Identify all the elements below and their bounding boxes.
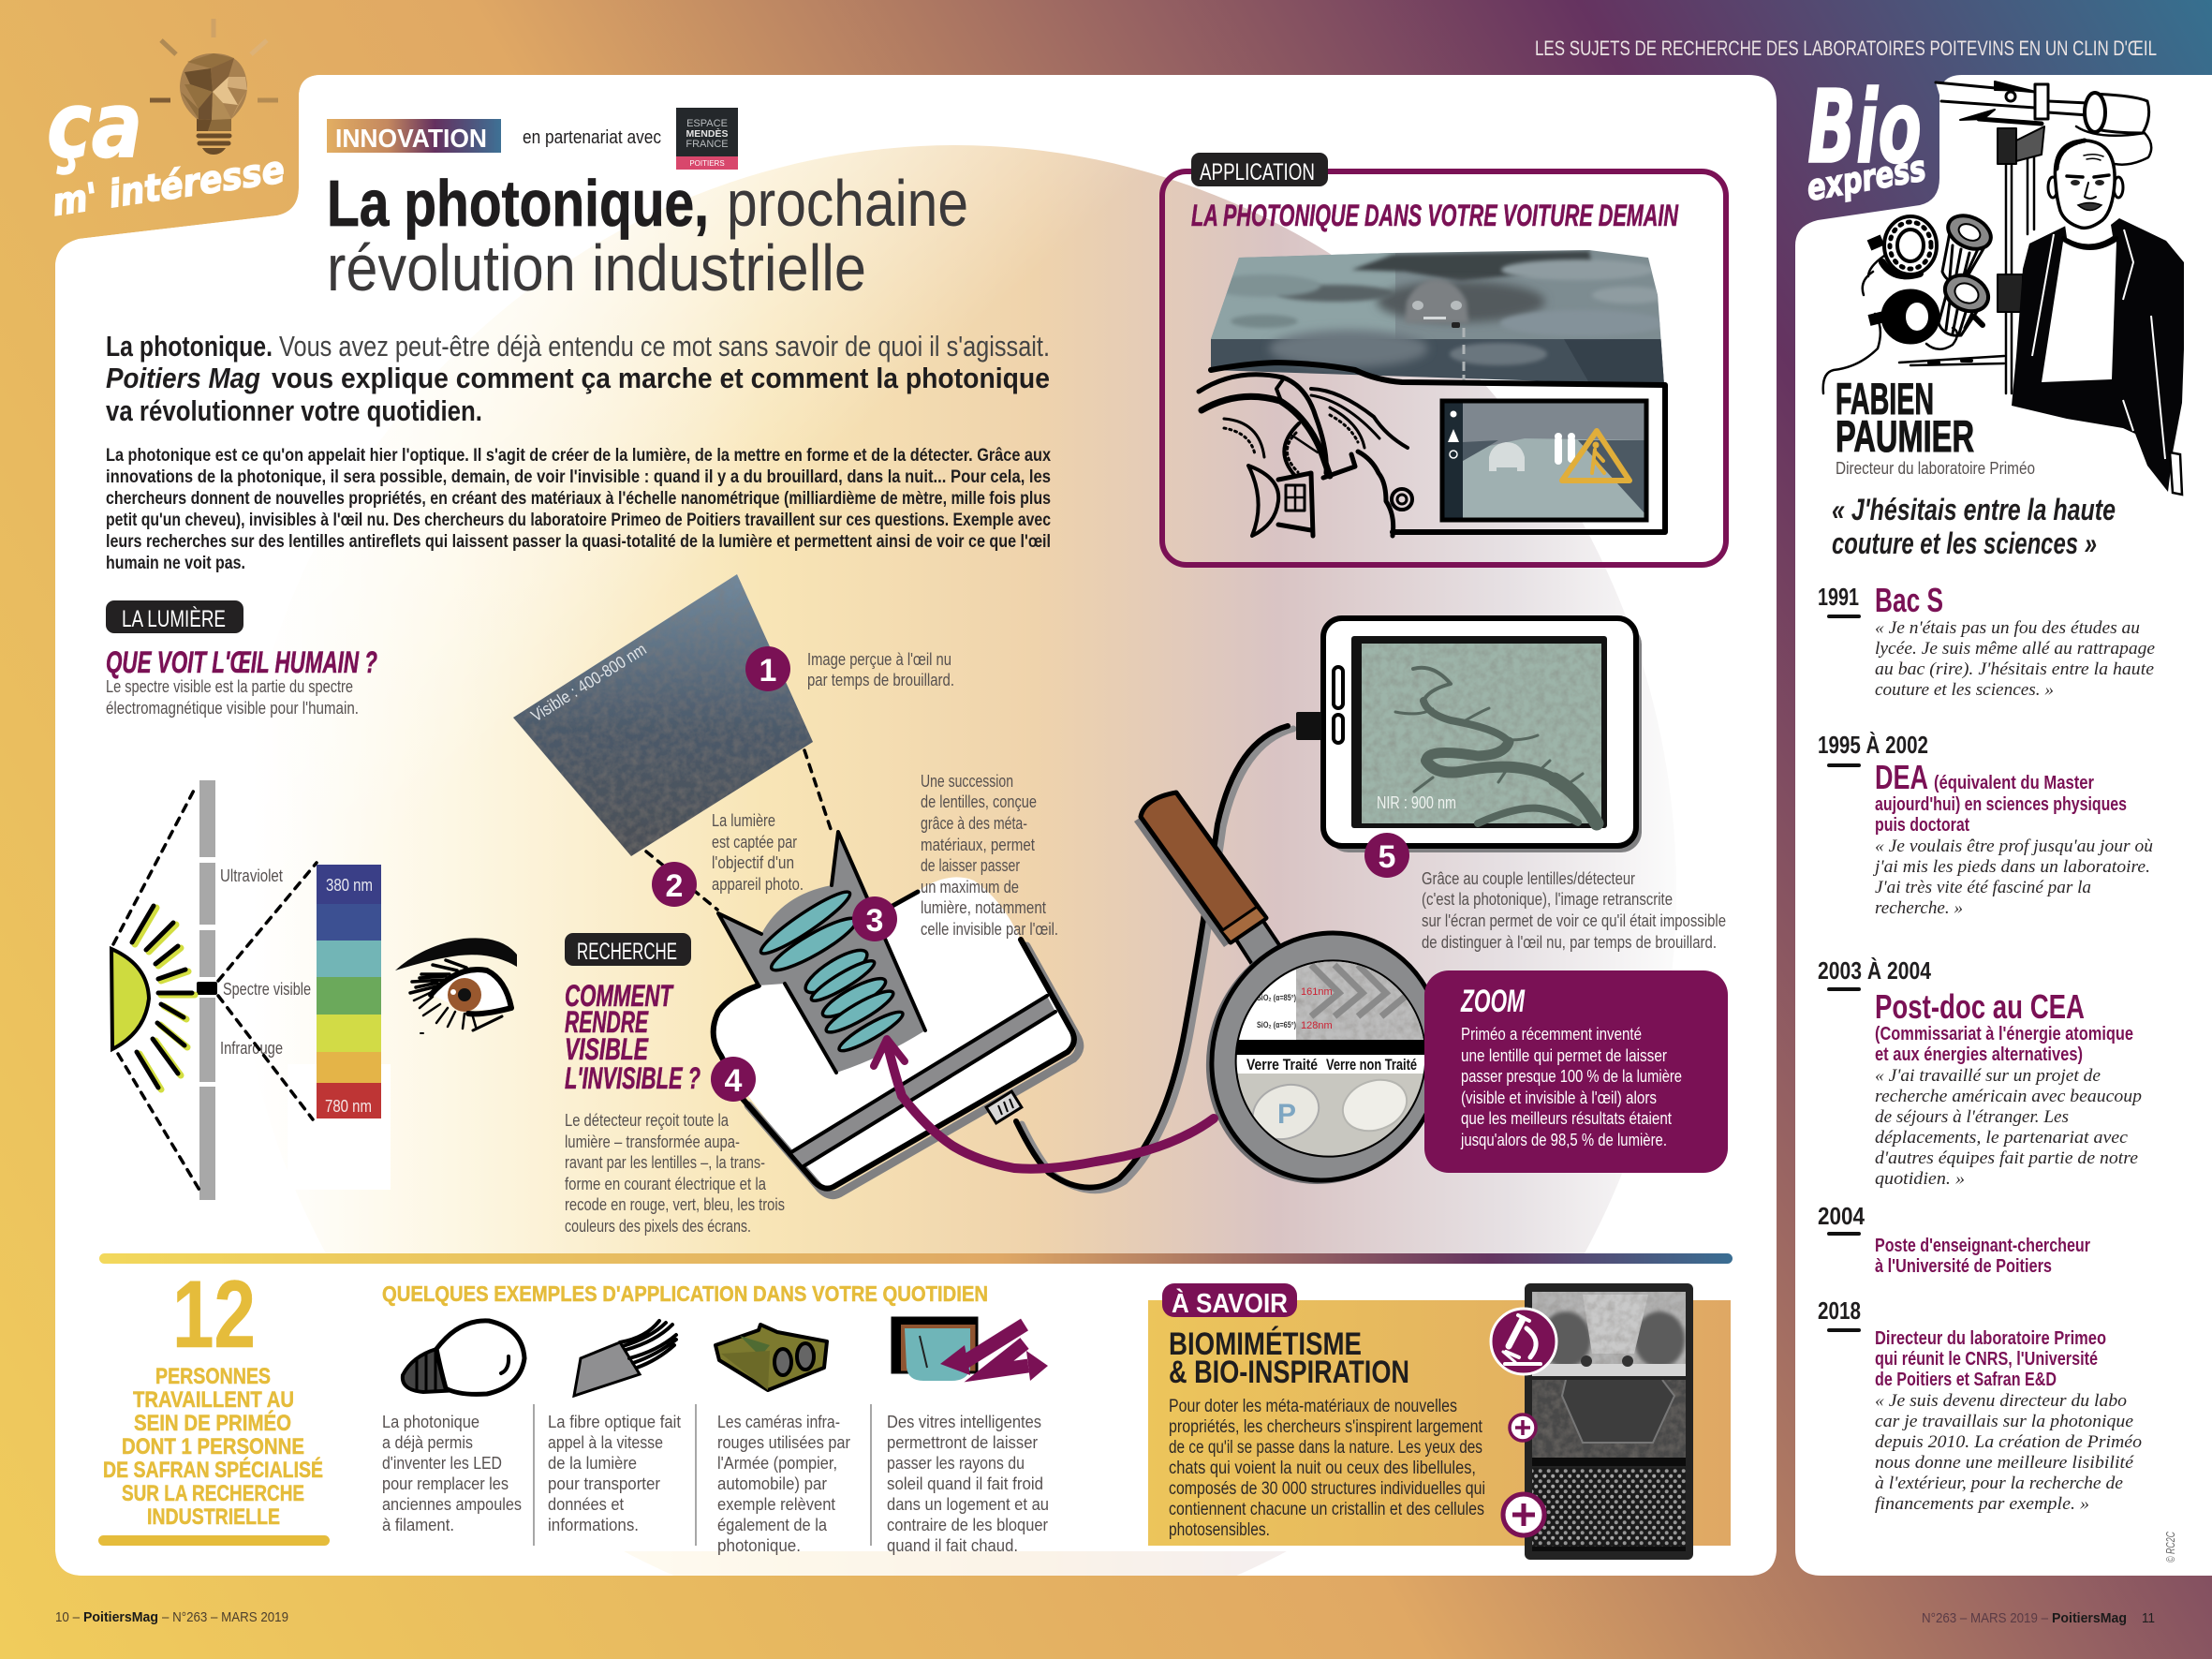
text: la lumière est captée: l'objectif d'un bbox=[712, 853, 794, 872]
cable between camera and tablet bbox=[1016, 726, 1293, 1191]
timeline: 2018: à l'extérieur, pour la recherche de bbox=[1875, 1474, 2123, 1493]
application text columns: à filament. bbox=[382, 1516, 454, 1534]
timeline: 2003 à 2004: d'autres équipes fait partie de notre bbox=[1875, 1148, 2138, 1168]
spectrum labels: Infrarouge bbox=[220, 1039, 283, 1058]
logo: ça m'intéresse: m' intéresse bbox=[50, 148, 288, 225]
credit: © RC2C bbox=[2163, 1532, 2177, 1563]
timeline: 2003 à 2004 bbox=[1818, 956, 2142, 1189]
tag: la lumière bbox=[106, 600, 243, 633]
application text columns: contraire de les bloquer bbox=[887, 1516, 1048, 1534]
panel: à savoir: contiennent chacune un cristallin et des cellules bbox=[1169, 1500, 1484, 1519]
timeline: 1991: au bac (rire). J'hésitais entre la haute bbox=[1875, 659, 2154, 679]
application text columns: photonique. bbox=[717, 1536, 801, 1555]
illustration: tablet bbox=[1296, 618, 1642, 852]
text: spectre visible bbox=[106, 677, 359, 718]
logo: ça m'intéresse: ça bbox=[47, 73, 142, 178]
logo: Espace Mendès France: POITIERS bbox=[689, 159, 725, 168]
text: la lumière est captée: appareil photo. bbox=[712, 875, 804, 894]
text: succession de lentilles: de laisser passer bbox=[921, 856, 1020, 875]
panel: main article bbox=[55, 75, 1777, 1635]
text: succession de lentilles bbox=[921, 772, 1058, 939]
timeline: 2004: à l'Université de Poitiers bbox=[1875, 1256, 2052, 1277]
panel: zoom: une lentille qui permet de laisser bbox=[1461, 1046, 1667, 1065]
timeline: 1995 à 2002: 1995 À 2002 bbox=[1818, 731, 1928, 759]
illustration: magnifying glass: Verre Traité bbox=[1246, 1056, 1318, 1074]
timeline: 2004: Poste d'enseignant-chercheur bbox=[1875, 1236, 2090, 1256]
logo: ça m'intéresse bbox=[47, 73, 288, 225]
footer right: N°263 – MARS 2019 – bbox=[1922, 1610, 2049, 1626]
application text columns: permettront de laisser bbox=[887, 1433, 1038, 1452]
timeline: 1995 à 2002 bbox=[1818, 731, 2153, 918]
timeline: 2003 à 2004: quotidien. » bbox=[1875, 1169, 1965, 1189]
text: succession de lentilles: celle invisible par l'œil. bbox=[921, 920, 1058, 939]
text: la lumière est captée: La lumière bbox=[712, 811, 775, 830]
panel: zoom: (visible et invisible à l'œil) alors bbox=[1461, 1089, 1657, 1107]
title: révolution industrielle bbox=[327, 231, 866, 304]
application text columns: Les caméras infra- bbox=[717, 1413, 840, 1431]
text: spectre visible: électromagnétique visible pour l'humain. bbox=[106, 699, 359, 718]
chart: visible spectrum colours bbox=[317, 865, 381, 1118]
title: La photonique, bbox=[327, 167, 709, 240]
logo: Espace Mendès France: FRANCE bbox=[686, 139, 729, 150]
icon: human eye bbox=[395, 938, 517, 1033]
stat: 12 personnes: SUR LA RECHERCHE bbox=[122, 1481, 304, 1506]
illustration: magnifying glass: 128nm bbox=[1301, 1020, 1333, 1031]
white patch behind spectrum bbox=[288, 1064, 391, 1190]
illustration: tablet: NIR : 900 nm bbox=[1377, 793, 1456, 812]
spectrum labels: Spectre visible bbox=[223, 980, 311, 999]
chart: electromagnetic spectrum bar bbox=[197, 780, 217, 1200]
timeline: 2003 à 2004: Post-doc au CEA bbox=[1875, 987, 2085, 1026]
timeline: 1991: « Je n'étais pas un fou des études au bbox=[1875, 618, 2140, 638]
heading: comment rendre visible l'invisible: L'INVISIBLE ? bbox=[565, 1061, 700, 1095]
application text columns: pour transporter bbox=[548, 1474, 660, 1493]
timeline: 1991 bbox=[1818, 581, 2155, 700]
text: succession de lentilles: grâce à des méta- bbox=[921, 814, 1027, 833]
timeline: 2018: depuis 2010. La création de Priméo bbox=[1875, 1432, 2142, 1452]
logo: bio express bbox=[1804, 69, 1929, 209]
panel: à savoir: & BIO-INSPIRATION bbox=[1169, 1355, 1409, 1390]
chart: visible spectrum colours: 380 nm bbox=[326, 876, 373, 895]
body paragraph bbox=[106, 446, 1051, 573]
application text columns: d'inventer les LED bbox=[382, 1454, 502, 1473]
text: couple lentilles/détecteur: de distinguer à l'œil nu, par temps de brouillard. bbox=[1422, 933, 1717, 952]
stat: 12 personnes: SEIN DE PRIMÉO bbox=[134, 1410, 291, 1436]
timeline: 2003 à 2004: 2003 À 2004 bbox=[1818, 956, 1931, 985]
panel: zoom: passer presque 100 % de la lumière bbox=[1461, 1067, 1682, 1086]
text: couple lentilles/détecteur: Grâce au couple lentilles/détecteur bbox=[1422, 869, 1635, 888]
title bbox=[327, 167, 968, 304]
panel: à savoir: chats qui voient la nuit ou ceux des libellules, bbox=[1169, 1459, 1476, 1478]
timeline: 1995 à 2002: recherche. » bbox=[1875, 898, 1963, 918]
photo: visible image in fog: Visible : 400-800 nm bbox=[528, 640, 650, 725]
application text columns: dans un logement et au bbox=[887, 1495, 1049, 1514]
footer left: PoitiersMag bbox=[83, 1609, 158, 1625]
partner line: en partenariat avec bbox=[523, 127, 661, 148]
person bbox=[2012, 141, 2184, 495]
quote bbox=[1832, 493, 2116, 560]
timeline: 2003 à 2004: déplacements, le partenariat avec bbox=[1875, 1128, 2129, 1148]
application text columns: exemple relèvent bbox=[717, 1495, 835, 1514]
application text columns: quand il fait chaud. bbox=[887, 1536, 1018, 1555]
tag: recherche bbox=[565, 933, 691, 966]
logo: bio express: Bio bbox=[1807, 69, 1922, 186]
name: Fabien Paumier: PAUMIER bbox=[1836, 411, 1974, 461]
optical rings bbox=[1823, 209, 1997, 393]
logo: Espace Mendès France: ESPACE bbox=[686, 118, 728, 129]
text: le détecteur bbox=[565, 1111, 785, 1236]
panel: application: LA PHOTONIQUE DANS VOTRE VOITURE DEMAIN bbox=[1191, 199, 1679, 232]
panel: application: APPLICATION bbox=[1200, 159, 1315, 185]
panel: à savoir: propriétés, les chercheurs s'inspirent largement bbox=[1169, 1417, 1483, 1437]
machine arm bbox=[1899, 81, 2151, 393]
timeline: 2004: 2004 bbox=[1818, 1202, 1865, 1230]
text: image perçue: par temps de brouillard. bbox=[807, 671, 954, 689]
quote: « J'hésitais entre la haute bbox=[1832, 493, 2116, 526]
timeline: 2018: financements par exemple. » bbox=[1875, 1494, 2089, 1514]
text: couple lentilles/détecteur: sur l'écran permet de voir ce qu'il était impossible bbox=[1422, 911, 1726, 930]
timeline: 2018 bbox=[1818, 1296, 2142, 1514]
panel: zoom: jusqu'alors de 98,5 % de lumière. bbox=[1460, 1131, 1667, 1149]
stat: 12 personnes: 12 bbox=[172, 1261, 256, 1368]
timeline: 2004 bbox=[1818, 1202, 2090, 1277]
body paragraph: leurs recherches sur des lentilles antireflets qui laissent passer la quasi-totalité de la lumière et permettent ainsi de voir ce que l'œil bbox=[106, 532, 1051, 552]
role: Directeur du laboratoire Priméo bbox=[1836, 459, 2035, 478]
panel: zoom: Priméo a récemment inventé bbox=[1461, 1025, 1642, 1044]
text: le détecteur: lumière – transformée aupa- bbox=[565, 1133, 740, 1151]
application text columns: l'Armée (pompier, bbox=[717, 1454, 837, 1473]
heading: comment rendre visible l'invisible: RENDRE bbox=[565, 1005, 649, 1039]
application text columns: La fibre optique fait bbox=[548, 1413, 681, 1431]
timeline: 1991: lycée. Je suis même allé au rattrapage bbox=[1875, 639, 2155, 659]
panel: à savoir: BIOMIMÉTISME bbox=[1169, 1326, 1362, 1362]
footer right: 11 bbox=[2142, 1610, 2155, 1626]
body paragraph: La photonique est ce qu'on appelait hier l'optique. Il s'agit de créer de la lumière, de la mettre en forme et de la détecter. Grâce aux bbox=[106, 446, 1051, 466]
stat: 12 personnes bbox=[98, 1261, 330, 1546]
icon: large plus bbox=[1503, 1494, 1544, 1535]
text: la lumière est captée: est captée par bbox=[712, 833, 797, 852]
tag: la lumière: LA LUMIÈRE bbox=[122, 605, 226, 632]
application text columns: pour remplacer les bbox=[382, 1474, 509, 1493]
application text columns: rouges utilisées par bbox=[717, 1433, 850, 1452]
illustration: magnifying glass: 161nm bbox=[1301, 986, 1333, 998]
stat: 12 personnes: DE SAFRAN SPÉCIALISÉ bbox=[103, 1457, 323, 1483]
application text columns: passer les rayons du bbox=[887, 1454, 1025, 1473]
intro paragraph: vous explique comment ça marche et comment la photonique bbox=[272, 362, 1050, 394]
photo: visible image in fog bbox=[513, 574, 813, 856]
application text columns: informations. bbox=[548, 1516, 639, 1534]
timeline: 2003 à 2004: « J'ai travaillé sur un projet de bbox=[1875, 1066, 2101, 1086]
icon: microscope badge bbox=[1491, 1309, 1556, 1374]
tag: recherche: RECHERCHE bbox=[577, 939, 677, 965]
tag: innovation: INNOVATION bbox=[335, 124, 487, 153]
numbered markers bbox=[652, 646, 1409, 1102]
timeline: 1991: 1991 bbox=[1818, 583, 1859, 611]
timeline: 2018: car je travaillais sur la photonique bbox=[1875, 1412, 2133, 1431]
timeline: 1991: couture et les sciences. » bbox=[1875, 680, 2054, 700]
intro paragraph: Poitiers Mag bbox=[106, 362, 260, 394]
text: couple lentilles/détecteur: (c'est la photonique), l'image retranscrite bbox=[1422, 890, 1673, 909]
spectrum labels bbox=[220, 867, 311, 1058]
icon: low-poly light bulb bbox=[150, 19, 278, 155]
text: spectre visible: Le spectre visible est la partie du spectre bbox=[106, 677, 353, 696]
illustration: magnifying glass: P bbox=[1277, 1099, 1296, 1130]
cable plug bbox=[986, 1091, 1022, 1123]
illustration: magnifying glass bbox=[1134, 791, 1427, 1184]
body paragraph: humain ne voit pas. bbox=[106, 554, 245, 573]
timeline: 2018: nous donne une meilleure lisibilité bbox=[1875, 1453, 2135, 1473]
text: le détecteur: ravant par les lentilles –, la trans- bbox=[565, 1153, 765, 1172]
timeline: 2003 à 2004: recherche américain avec beaucoup bbox=[1875, 1087, 2142, 1106]
icon: steering wheel and gauges bbox=[1199, 375, 1412, 536]
timeline: 2003 à 2004: et aux énergies alternatives) bbox=[1875, 1044, 2083, 1065]
lens barrel bbox=[718, 832, 925, 1073]
arrow: from lens detail to camera lens bbox=[874, 1039, 1214, 1169]
body paragraph: chercheurs donnent de nouvelles propriétés, en créant des matériaux à l'échelle nanométrique (milliardième de mètre, mille fois plus bbox=[106, 489, 1051, 509]
quote: couture et les sciences » bbox=[1832, 526, 2097, 560]
panel: à savoir: de ce qu'il se passe dans la nature. Les yeux des bbox=[1169, 1438, 1482, 1458]
timeline: 1995 à 2002: puis doctorat bbox=[1875, 815, 1969, 836]
text: le détecteur: recode en rouge, vert, bleu, les trois bbox=[565, 1195, 785, 1214]
intro paragraph: Vous avez peut-être déjà entendu ce mot sans savoir de quoi il s'agissait. bbox=[279, 330, 1050, 363]
timeline: 2003 à 2004: (Commissariat à l'énergie atomique bbox=[1875, 1024, 2133, 1044]
timeline: 2003 à 2004: de séjours à l'étranger. Les bbox=[1875, 1107, 2069, 1127]
panel: à savoir bbox=[1148, 1283, 1731, 1546]
application text columns: anciennes ampoules bbox=[382, 1495, 522, 1514]
heading: que voit l'œil humain: QUE VOIT L'ŒIL HUMAIN ? bbox=[106, 645, 377, 679]
panel: zoom: ZOOM bbox=[1460, 984, 1525, 1019]
timeline: 2018: « Je suis devenu directeur du labo bbox=[1875, 1391, 2127, 1411]
timeline: 1995 à 2002: j'ai mis les pieds dans un laboratoire. bbox=[1872, 857, 2150, 877]
illustration: camera body bbox=[712, 832, 1080, 1195]
application text columns: données et bbox=[548, 1495, 624, 1514]
icon: LED bulb bbox=[403, 1321, 524, 1394]
application text columns: de la lumière bbox=[548, 1454, 637, 1473]
title: prochaine bbox=[727, 167, 968, 240]
panel: à savoir: photosensibles. bbox=[1169, 1520, 1270, 1540]
application text columns bbox=[382, 1413, 1049, 1555]
application text columns: Des vitres intelligentes bbox=[887, 1413, 1041, 1431]
panel: bio express bbox=[1795, 75, 2212, 1576]
heading: comment rendre visible l'invisible: VISIBLE bbox=[565, 1032, 649, 1066]
name: Fabien Paumier bbox=[1836, 374, 1974, 461]
heading: comment rendre visible l'invisible: COMMENT bbox=[565, 979, 674, 1013]
chart: visible spectrum colours: 780 nm bbox=[325, 1097, 372, 1116]
panel: à savoir: composés de 30 000 structures individuelles qui bbox=[1169, 1479, 1485, 1499]
application text columns: soleil quand il fait froid bbox=[887, 1474, 1043, 1493]
divider bar bbox=[99, 1253, 1733, 1264]
text: succession de lentilles: lumière, notamment bbox=[921, 898, 1046, 917]
body paragraph: innovations de la photonique, il sera possible, demain, de voir l'invisible : quand il y a du brouillard, dans la nuit... Pour cela, les bbox=[106, 467, 1051, 487]
application text columns: également de la bbox=[717, 1516, 828, 1534]
footer left bbox=[55, 1609, 288, 1625]
text: succession de lentilles: de lentilles, conçue bbox=[921, 792, 1037, 811]
application text columns: a déjà permis bbox=[382, 1433, 473, 1452]
stat: 12 personnes: PERSONNES bbox=[155, 1364, 271, 1389]
timeline: 1995 à 2002: « Je voulais être prof jusqu'au jour où bbox=[1875, 837, 2153, 856]
text: le détecteur: couleurs des pixels des écrans. bbox=[565, 1217, 751, 1236]
body paragraph: petit qu'un cheveu), invisibles à l'œil nu. Des chercheurs du laboratoire Primeo de Poitiers travaillent sur ces questions. Exemple avec bbox=[106, 511, 1051, 530]
heading: exemples d'application: QUELQUES EXEMPLES D'APPLICATION DANS VOTRE QUOTIDIEN bbox=[382, 1281, 988, 1306]
application text columns: La photonique bbox=[382, 1413, 479, 1431]
text: la lumière est captée bbox=[712, 811, 804, 894]
timeline: 2018: de Poitiers et Safran E&D bbox=[1875, 1370, 2057, 1390]
illustration: dashboard night-vision screen bbox=[1442, 401, 1646, 520]
timeline: 2018: Directeur du laboratoire Primeo bbox=[1875, 1328, 2106, 1349]
stat: 12 personnes: DONT 1 PERSONNE bbox=[122, 1434, 304, 1459]
name: Fabien Paumier: FABIEN bbox=[1836, 374, 1934, 423]
text: image perçue bbox=[807, 650, 954, 689]
icon: oncoming car bbox=[1405, 279, 1468, 380]
numbered markers: 2 bbox=[666, 868, 683, 904]
icon: infrared camera bbox=[715, 1325, 827, 1390]
icon: optical fibre bbox=[574, 1321, 676, 1396]
intro paragraph bbox=[106, 330, 1050, 427]
spectrum labels: Ultraviolet bbox=[220, 867, 283, 885]
illustration: magnifying glass: Verre non Traité bbox=[1326, 1056, 1417, 1074]
panel: zoom: que les meilleurs résultats étaient bbox=[1461, 1109, 1672, 1128]
panel: à savoir: Pour doter les méta-matériaux de nouvelles bbox=[1169, 1397, 1457, 1416]
text: couple lentilles/détecteur bbox=[1422, 869, 1726, 952]
stat: 12 personnes: TRAVAILLENT AU bbox=[133, 1387, 294, 1413]
panel: application bbox=[1162, 153, 1726, 565]
illustration: researcher portrait and optical bench bbox=[1823, 81, 2184, 495]
logo: Espace Mendès France bbox=[676, 108, 738, 170]
numbered markers: 5 bbox=[1379, 839, 1395, 875]
stat: 12 personnes: INDUSTRIELLE bbox=[147, 1504, 280, 1530]
illustration: car in fog bbox=[1199, 245, 1667, 536]
text: succession de lentilles: Une succession bbox=[921, 772, 1013, 791]
dashed projection lines bbox=[113, 750, 831, 1192]
timeline: 1995 à 2002: aujourd'hui) en sciences physiques bbox=[1875, 794, 2127, 815]
numbered markers: 1 bbox=[759, 653, 776, 689]
panel: zoom bbox=[1424, 970, 1728, 1173]
timeline: 1995 à 2002: J'ai très vite été fasciné par la bbox=[1875, 878, 2091, 897]
intro paragraph: La photonique. bbox=[106, 330, 273, 363]
application text columns: appel à la vitesse bbox=[548, 1433, 663, 1452]
photos: insect eye microscopy bbox=[1491, 1283, 1693, 1560]
icon: smart window bbox=[892, 1318, 1048, 1381]
panel: à savoir: À SAVOIR bbox=[1172, 1287, 1288, 1319]
text: le détecteur: Le détecteur reçoit toute la bbox=[565, 1111, 730, 1130]
illustration: magnifying glass: SiO₂ (α=65°) bbox=[1257, 1020, 1296, 1029]
text: le détecteur: forme en courant électrique et la bbox=[565, 1175, 767, 1193]
footer left: – N°263 – MARS 2019 bbox=[162, 1609, 288, 1625]
timeline: 1995 à 2002: DEA bbox=[1875, 758, 1928, 796]
logo: bio express: express bbox=[1804, 147, 1929, 209]
footer right: PoitiersMag bbox=[2052, 1610, 2127, 1626]
icon: sun with rays bbox=[111, 906, 195, 1089]
text: succession de lentilles: matériaux, permet bbox=[921, 836, 1035, 854]
timeline: 2018: 2018 bbox=[1818, 1296, 1861, 1325]
intro paragraph: va révolutionner votre quotidien. bbox=[106, 394, 482, 427]
numbered markers: 3 bbox=[866, 903, 883, 939]
timeline: 1995 à 2002: (équivalent du Master bbox=[1934, 773, 2094, 793]
heading: comment rendre visible l'invisible bbox=[565, 979, 700, 1095]
timeline: 2018: qui réunit le CNRS, l'Université bbox=[1875, 1349, 2098, 1370]
numbered markers: 4 bbox=[725, 1063, 743, 1099]
application text columns: automobile) par bbox=[717, 1474, 827, 1493]
footer right bbox=[1922, 1610, 2155, 1626]
text: image perçue: Image perçue à l'œil nu bbox=[807, 650, 951, 669]
text: succession de lentilles: un maximum de bbox=[921, 878, 1019, 896]
illustration: magnifying glass: SiO₂ (α=85°) bbox=[1257, 993, 1296, 1002]
icon: small plus bbox=[1510, 1415, 1536, 1441]
timeline: 1991: Bac S bbox=[1875, 581, 1943, 619]
footer left: 10 – bbox=[55, 1609, 81, 1625]
logo: Espace Mendès France: MENDÈS bbox=[686, 127, 728, 140]
